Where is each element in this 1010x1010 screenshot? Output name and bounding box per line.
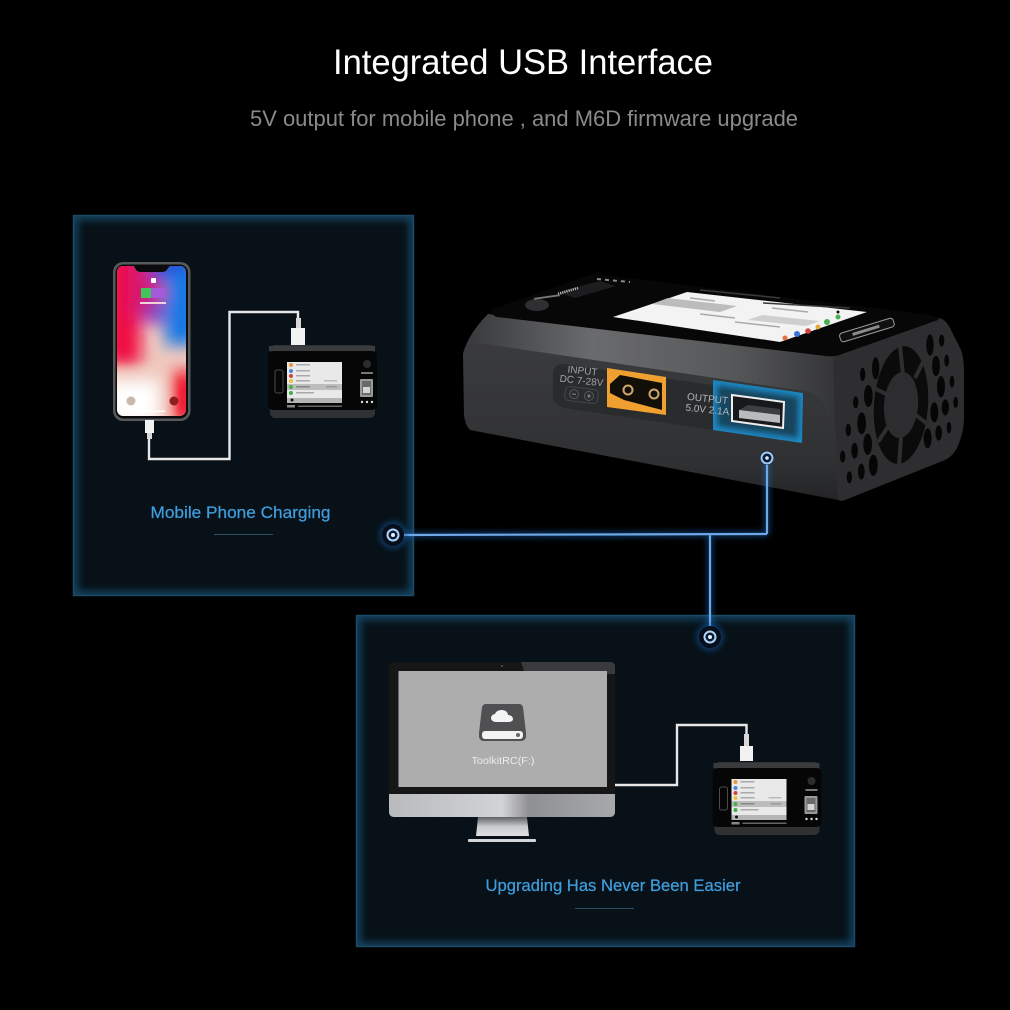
- label: upgrading: Upgrading Has Never Been Easier: [486, 876, 741, 895]
- vent holes: [840, 334, 958, 483]
- node: usb port: [760, 451, 774, 465]
- charger front face: [463, 342, 838, 500]
- output label: [685, 392, 731, 418]
- label underline: [214, 534, 273, 535]
- flashlight button: [126, 396, 136, 406]
- lock icon: [151, 278, 156, 283]
- camera button: [170, 396, 178, 406]
- fan: [870, 344, 932, 466]
- node: upgrade panel: [696, 623, 724, 651]
- front recess strip: [553, 364, 713, 430]
- lightning connector: [145, 420, 154, 439]
- input label: [559, 364, 605, 389]
- usb connector: [291, 318, 305, 345]
- charger top black face: [491, 274, 939, 356]
- input label: DC 7-28V: [559, 374, 604, 389]
- logo badge: [839, 318, 895, 343]
- icon: mini charger: [268, 345, 377, 418]
- icon: smartphone: [113, 262, 190, 421]
- input label: INPUT: [567, 364, 598, 379]
- icon: desktop monitor: [389, 662, 615, 842]
- icon: mini charger: [712, 762, 822, 835]
- cable: monitor to charger: [615, 725, 746, 785]
- title: Integrated USB Interface: [333, 43, 713, 82]
- output label: OUTPUT: [686, 392, 728, 407]
- drive label: ToolkitRC(F:): [472, 756, 534, 767]
- polarity marks: [564, 386, 599, 404]
- label: mobile phone charging: Mobile Phone Charging: [150, 503, 330, 522]
- top face strip details: [700, 290, 850, 308]
- cable: phone to charger: [149, 312, 298, 459]
- blue connector lines: [393, 458, 767, 637]
- home bar: [133, 410, 165, 412]
- xt60 input connector: [607, 368, 666, 415]
- power knob: [525, 299, 549, 311]
- usb highlight box: [713, 380, 803, 443]
- touch screen: [613, 292, 867, 342]
- top vent and label: [534, 279, 630, 300]
- battery indicator: [141, 288, 165, 298]
- usb output port: [732, 395, 784, 428]
- icon: cloud drive: [479, 704, 526, 741]
- lock screen text: [140, 302, 166, 304]
- charger gray top band: [463, 314, 835, 428]
- panel: firmware upgrade: [356, 615, 855, 947]
- charger product: [463, 274, 964, 501]
- charger side with fan: [832, 318, 964, 501]
- panel: mobile phone charging: [73, 215, 414, 596]
- label underline: [575, 908, 634, 909]
- usb connector: [740, 734, 753, 761]
- node: charging panel: [379, 521, 407, 549]
- subtitle: 5V output for mobile phone , and M6D firmware upgrade: [250, 106, 798, 131]
- output label: 5.0V 2.1A: [685, 403, 730, 418]
